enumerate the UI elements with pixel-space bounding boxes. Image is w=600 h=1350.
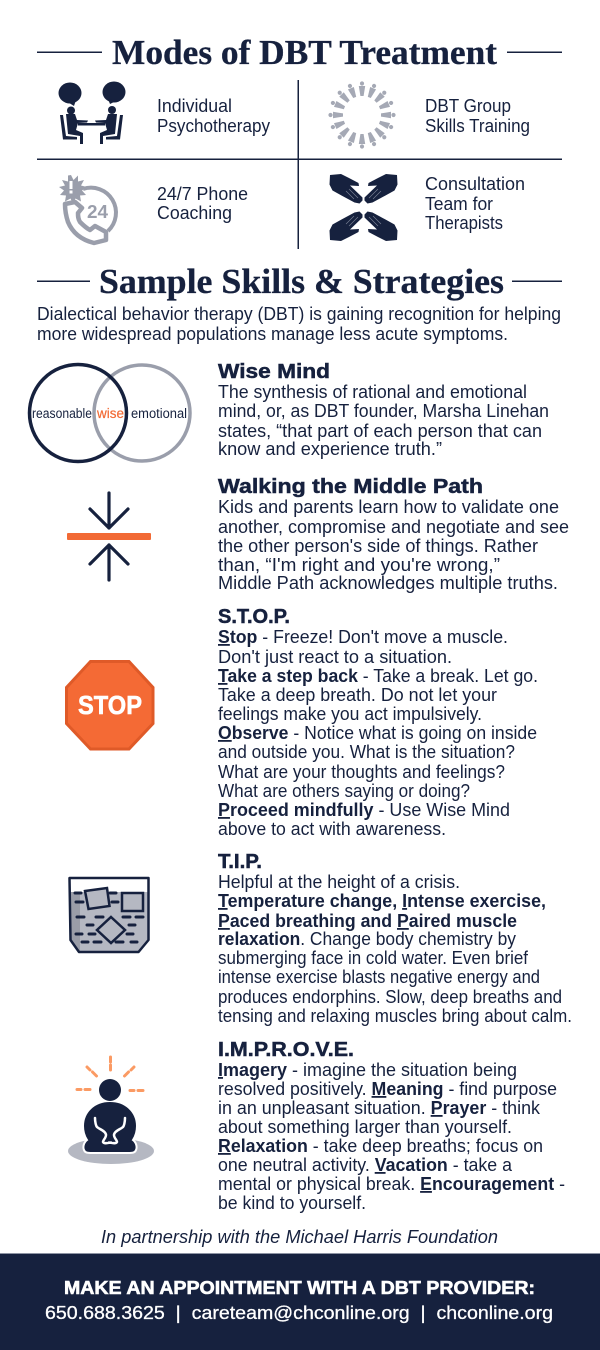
text block: Wise Mind: states, “that part of each person that can: [218, 421, 542, 441]
text block: S.T.O.P.: feelings make you act impulsively.: [218, 704, 482, 724]
text block: Wise Mind: mind, or, as DBT founder, Marsha Linehan: [218, 401, 549, 421]
text block: I.M.P.R.O.V.E.: in an unpleasant situation. Prayer - think: [218, 1098, 541, 1118]
panel: call to action footer: 650.688.3625 | careteam@chconline.org | chconline.org: [45, 1303, 553, 1323]
icon: stop sign: [66, 662, 153, 749]
text block: S.T.O.P.: [218, 606, 538, 839]
icon: glass of ice water: [69, 878, 149, 952]
text block: S.T.O.P.: Take a deep breath. Do not let your: [218, 685, 497, 705]
text block: T.I.P.: T.I.P.: [218, 851, 262, 873]
icon: wise mind venn diagram: emotional: [131, 406, 187, 421]
icon: stop sign: STOP: [78, 690, 142, 720]
icon: circle of group members: [328, 81, 396, 149]
text block: S.T.O.P.: What are others saying or doing?: [218, 781, 470, 801]
icon: meditating person: [68, 1057, 154, 1164]
text: DBT Group Skills Training: DBT Group: [425, 96, 511, 116]
text block: I.M.P.R.O.V.E.: about something larger than yourself.: [218, 1117, 512, 1137]
text block: S.T.O.P.: Observe - Notice what is going on inside: [218, 723, 537, 743]
text block: Wise Mind: The synthesis of rational and emotional: [218, 382, 527, 402]
text: introduction: [37, 304, 561, 344]
text block: T.I.P.: Paced breathing and Paired muscle: [218, 911, 517, 931]
text block: I.M.P.R.O.V.E.: I.M.P.R.O.V.E.: [218, 1039, 354, 1061]
text: introduction: Dialectical behavior therapy (DBT) is gaining recognition for helping: [37, 304, 561, 324]
text block: S.T.O.P.: Proceed mindfully - Use Wise Mind: [218, 800, 510, 820]
text: 24/7 Phone Coaching: 24/7 Phone: [157, 184, 248, 204]
text: Consultation Team for Therapists: Team for: [425, 194, 493, 214]
text: 24/7 Phone Coaching: [157, 184, 248, 223]
icon: wise mind venn diagram: wise: [96, 406, 124, 421]
icon: 24 hour phone: [59, 175, 116, 243]
text block: S.T.O.P.: S.T.O.P.: [218, 606, 290, 628]
text block: Walking the Middle Path: another, compromise and negotiate and see: [218, 517, 569, 537]
icon: wise mind venn diagram: [30, 364, 190, 462]
text block: Walking the Middle Path: Walking the Middle Path: [218, 476, 483, 498]
text block: S.T.O.P.: Stop - Freeze! Don't move a muscle.: [218, 627, 508, 647]
text block: I.M.P.R.O.V.E.: one neutral activity. Vacation - take a: [218, 1155, 513, 1175]
text: Individual Psychotherapy: Individual: [157, 96, 232, 116]
text block: Wise Mind: know and experience truth.”: [218, 439, 442, 459]
icon: two people talking at a table: [58, 82, 126, 144]
text block: I.M.P.R.O.V.E.: Relaxation - take deep breaths; focus on: [218, 1136, 543, 1156]
text block: T.I.P.: submerging face in cold water. Even brief: [218, 948, 529, 968]
text block: T.I.P.: intense exercise blasts negative energy and: [218, 967, 540, 987]
icon: four hands meeting: [330, 174, 398, 241]
icon: wise mind venn diagram: reasonable: [32, 406, 92, 421]
text block: T.I.P.: Helpful at the height of a crisis.: [218, 872, 460, 892]
text block: T.I.P.: [218, 851, 572, 1026]
text block: S.T.O.P.: What are your thoughts and feelings?: [218, 762, 505, 782]
text: Individual Psychotherapy: Psychotherapy: [157, 116, 270, 136]
text: Individual Psychotherapy: [157, 96, 270, 136]
icon: arrows converging on a bar: [67, 493, 151, 580]
text block: S.T.O.P.: above to act with awareness.: [218, 819, 446, 839]
text block: T.I.P.: relaxation. Change body chemistry by: [218, 929, 516, 949]
text block: Wise Mind: [218, 361, 549, 459]
text block: S.T.O.P.: Take a step back - Take a break. Let go.: [218, 666, 538, 686]
text block: Wise Mind: Wise Mind: [218, 361, 330, 383]
text: DBT Group Skills Training: [425, 96, 530, 136]
text block: Walking the Middle Path: [218, 476, 569, 593]
text block: T.I.P.: Temperature change, Intense exercise,: [218, 891, 546, 911]
text block: Walking the Middle Path: Kids and parents learn how to validate one: [218, 497, 559, 517]
text block: I.M.P.R.O.V.E.: mental or physical break. Encouragement -: [218, 1174, 565, 1194]
panel: call to action footer: [0, 1253, 600, 1350]
text block: Walking the Middle Path: the other person's side of things. Rather: [218, 536, 538, 556]
text block: T.I.P.: produces endorphins. Slow, deep breaths and: [218, 987, 562, 1007]
text: partnership credit: In partnership with the Michael Harris Foundation: [101, 1227, 498, 1247]
text block: Walking the Middle Path: than, “I'm right and you're wrong,”: [218, 555, 500, 575]
text block: Walking the Middle Path: Middle Path acknowledges multiple truths.: [218, 573, 558, 593]
text block: I.M.P.R.O.V.E.: Imagery - imagine the situation being: [218, 1060, 517, 1080]
text block: I.M.P.R.O.V.E.: resolved positively. Meaning - find purpose: [218, 1079, 557, 1099]
text: Consultation Team for Therapists: Consultation: [425, 174, 525, 194]
text: Consultation Team for Therapists: [425, 174, 525, 233]
panel: treatment modes grid: [37, 80, 562, 249]
text: DBT Group Skills Training: Skills Training: [425, 116, 530, 136]
text: Consultation Team for Therapists: Therapists: [425, 213, 503, 233]
title: Modes of DBT Treatment: Modes of DBT Treatment: [112, 33, 497, 72]
text block: T.I.P.: tensing and relaxing muscles bring about calm.: [218, 1006, 572, 1026]
heading: Sample Skills and Strategies: Sample Skills & Strategies: [99, 262, 504, 301]
text block: I.M.P.R.O.V.E.: be kind to yourself.: [218, 1193, 366, 1213]
text: introduction: more widespread populations manage less acute symptoms.: [37, 324, 508, 344]
text block: S.T.O.P.: Don't just react to a situation.: [218, 647, 452, 667]
icon: 24 hour phone: 24: [87, 202, 108, 222]
text: 24/7 Phone Coaching: Coaching: [157, 203, 232, 223]
text block: S.T.O.P.: and outside you. What is the situation?: [218, 742, 515, 762]
panel: call to action footer: MAKE AN APPOINTMENT WITH A DBT PROVIDER:: [64, 1278, 535, 1298]
text block: I.M.P.R.O.V.E.: [218, 1039, 565, 1213]
